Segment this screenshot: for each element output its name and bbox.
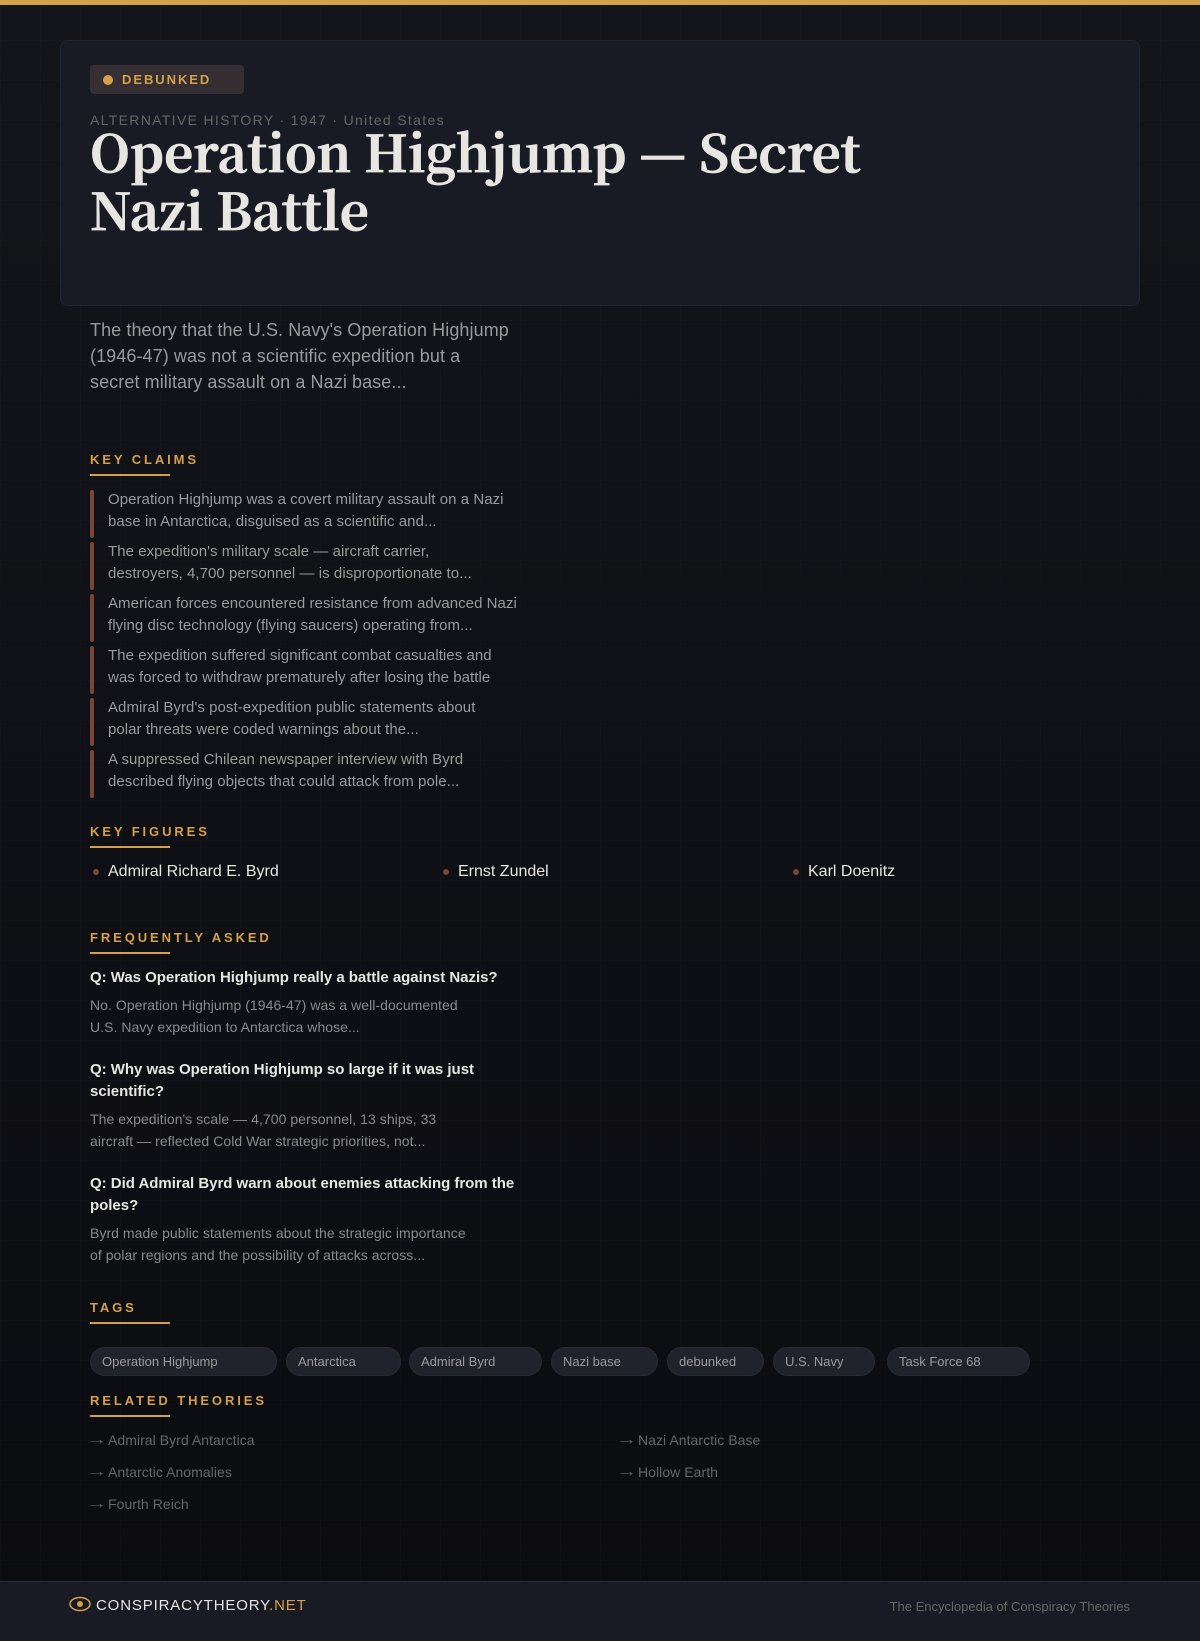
claim 3: American forces encountered resistance from advanced Nazi xyxy=(108,595,517,612)
related link: → xyxy=(86,1495,107,1511)
FAQ 3 answer: Byrd made public statements about the strategic importance xyxy=(90,1225,466,1241)
title: Operation Highjump — Secret xyxy=(90,114,861,187)
tag: Admiral Byrd xyxy=(421,1354,495,1369)
claim 4: The expedition suffered significant combat casualties and xyxy=(108,647,492,664)
related link: Nazi Antarctic Base xyxy=(638,1432,760,1448)
summary text: secret military assault on a Nazi base... xyxy=(90,372,407,392)
heading: key figures: KEY FIGURES xyxy=(90,824,210,839)
panel: header card xyxy=(60,40,1140,306)
FAQ 3 question: poles? xyxy=(90,1197,138,1214)
claim 5: Admiral Byrd's post-expedition public statements about xyxy=(108,699,475,716)
tag: Nazi base xyxy=(563,1354,621,1369)
tag xyxy=(551,1347,658,1376)
FAQ 3 answer xyxy=(90,1225,466,1263)
title xyxy=(90,114,861,244)
panel: key figures xyxy=(93,863,895,880)
FAQ 1 question: Q: Was Operation Highjump really a battle against Nazis? xyxy=(90,969,498,986)
claim 4 xyxy=(108,647,492,686)
heading: key claims: KEY CLAIMS xyxy=(90,452,199,467)
tag xyxy=(286,1347,401,1376)
FAQ 3 answer: of polar regions and the possibility of attacks across... xyxy=(90,1247,425,1263)
FAQ 2 question: Q: Why was Operation Highjump so large if it was just xyxy=(90,1061,474,1078)
related link: Antarctic Anomalies xyxy=(108,1464,232,1480)
FAQ 2 question xyxy=(90,1061,474,1100)
title: Nazi Battle xyxy=(90,172,369,244)
claim 6 xyxy=(108,751,463,790)
claim 2 xyxy=(108,543,472,582)
related link: Fourth Reich xyxy=(108,1496,189,1512)
FAQ 3 question: Q: Did Admiral Byrd warn about enemies attacking from the xyxy=(90,1175,514,1192)
figure 2: Ernst Zundel xyxy=(458,863,549,880)
figure 3: Karl Doenitz xyxy=(808,863,895,880)
tag: Operation Highjump xyxy=(102,1354,218,1369)
related link: → xyxy=(616,1431,637,1447)
panel: key claims list xyxy=(90,490,517,798)
top accent bar xyxy=(0,0,1200,5)
FAQ 2 answer: The expedition's scale — 4,700 personnel, 13 ships, 33 xyxy=(90,1111,436,1127)
FAQ 3 question xyxy=(90,1175,514,1214)
status badge xyxy=(90,65,244,94)
claim 1: Operation Highjump was a covert military assault on a Nazi xyxy=(108,491,504,508)
claim 6: described flying objects that could attack from pole... xyxy=(108,773,459,790)
footer xyxy=(0,1581,1200,1641)
tag: debunked xyxy=(679,1354,736,1369)
FAQ 1 answer: No. Operation Highjump (1946-47) was a well-documented xyxy=(90,997,458,1013)
tag xyxy=(667,1347,764,1376)
category line: ALTERNATIVE HISTORY · 1947 · United States xyxy=(90,112,445,128)
claim 5 xyxy=(108,699,476,738)
icon: eye logo xyxy=(69,1596,91,1612)
FAQ 2 answer xyxy=(90,1111,436,1149)
tag xyxy=(409,1347,542,1376)
tag xyxy=(887,1347,1030,1376)
tag: Task Force 68 xyxy=(899,1354,981,1369)
figure 1: Admiral Richard E. Byrd xyxy=(108,863,279,880)
related link: → xyxy=(86,1431,107,1447)
tag row xyxy=(90,1347,1030,1376)
claim 6: A suppressed Chilean newspaper interview with Byrd xyxy=(108,751,463,768)
claim 1 xyxy=(108,491,504,530)
logo wordmark: CONSPIRACYTHEORY.NET xyxy=(96,1597,307,1614)
tag xyxy=(773,1347,875,1376)
badge text: DEBUNKED xyxy=(122,72,211,87)
FAQ 1 answer: U.S. Navy expedition to Antarctica whose... xyxy=(90,1019,360,1035)
tag: Antarctica xyxy=(298,1354,356,1369)
FAQ 1 answer xyxy=(90,997,458,1035)
summary text: The theory that the U.S. Navy's Operation Highjump xyxy=(90,320,509,340)
tag: U.S. Navy xyxy=(785,1354,844,1369)
heading: related theories: RELATED THEORIES xyxy=(90,1393,267,1408)
FAQ 2 question: scientific? xyxy=(90,1083,164,1100)
heading: frequently asked: FREQUENTLY ASKED xyxy=(90,930,272,945)
FAQ 2 answer: aircraft — reflected Cold War strategic priorities, not... xyxy=(90,1133,425,1149)
claim 3 xyxy=(108,595,517,634)
claim 2: The expedition's military scale — aircraft carrier, xyxy=(108,543,429,560)
icon: badge dot xyxy=(103,75,113,85)
heading: tags: TAGS xyxy=(90,1300,137,1315)
related link: Admiral Byrd Antarctica xyxy=(108,1432,255,1448)
tag xyxy=(90,1347,277,1376)
related link: → xyxy=(616,1463,637,1479)
claim 4: was forced to withdraw prematurely after losing the battle xyxy=(108,669,490,686)
claim 3: flying disc technology (flying saucers) operating from... xyxy=(108,617,473,634)
summary text: (1946-47) was not a scientific expedition but a xyxy=(90,346,460,366)
summary text xyxy=(90,320,509,392)
claim 1: base in Antarctica, disguised as a scientific and... xyxy=(108,513,437,530)
related link: Hollow Earth xyxy=(638,1464,718,1480)
related link: → xyxy=(86,1463,107,1479)
tagline: The Encyclopedia of Conspiracy Theories xyxy=(890,1599,1130,1614)
claim 2: destroyers, 4,700 personnel — is disproportionate to... xyxy=(108,565,472,582)
claim 5: polar threats were coded warnings about the... xyxy=(108,721,419,738)
